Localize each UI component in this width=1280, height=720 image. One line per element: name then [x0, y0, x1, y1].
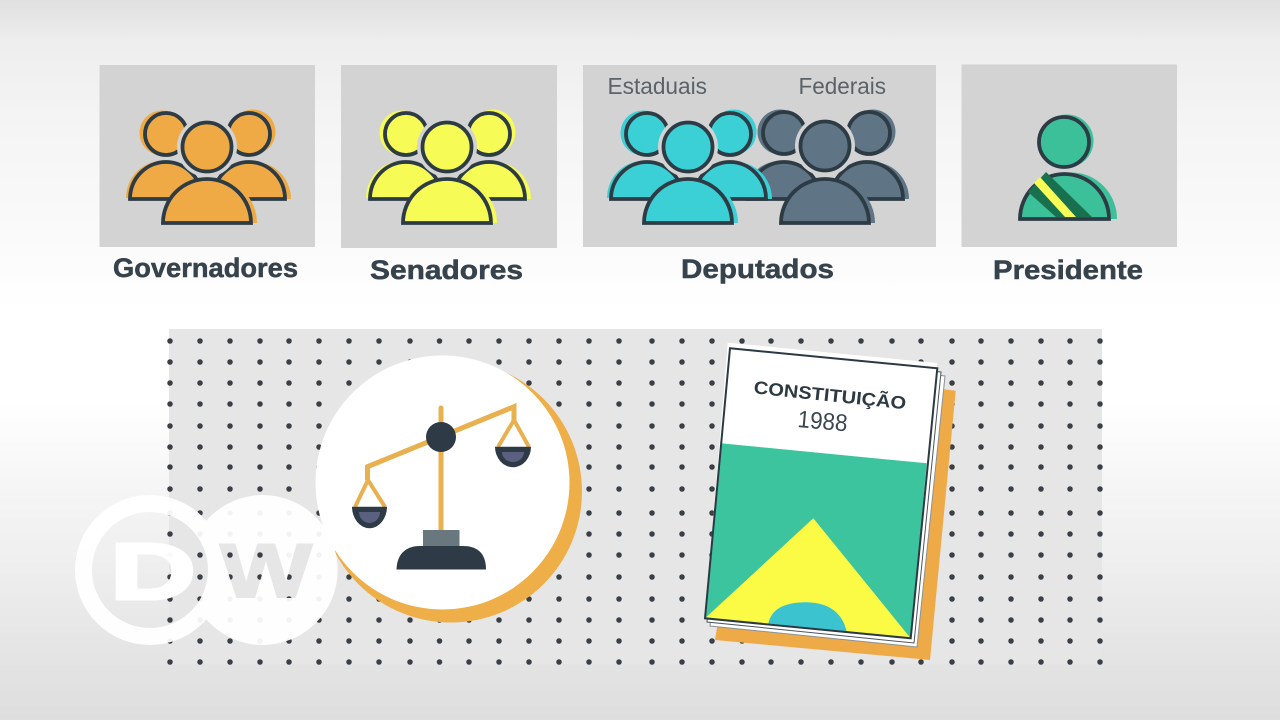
- icon: group of senators: [366, 110, 531, 223]
- panel: senadores: [341, 65, 557, 248]
- logo: DW: [75, 495, 338, 645]
- label: Governadores: Governadores: [113, 253, 298, 283]
- icon: president with sash: [1020, 114, 1117, 219]
- label: Presidente: Presidente: [993, 255, 1143, 285]
- icon: group of governors: [126, 110, 291, 223]
- panel: dotted background: [169, 329, 1102, 664]
- book year: 1988: [796, 406, 849, 437]
- label: Deputados: Deputados: [681, 254, 834, 284]
- label: Senadores: Senadores: [370, 255, 523, 285]
- panel: governadores: [100, 65, 315, 247]
- icon: scales of justice: [316, 356, 582, 622]
- book title: CONSTITUIÇÃO: [753, 376, 907, 413]
- label: Federais: Federais: [798, 73, 886, 99]
- panel: presidente: [962, 64, 1177, 247]
- icon: federal deputies: [744, 110, 909, 223]
- label: Estaduais: Estaduais: [608, 73, 707, 99]
- icon: constitution book: [705, 343, 956, 660]
- logo: DW: D: [110, 527, 196, 616]
- icon: state deputies: [607, 110, 772, 223]
- panel: deputados: [583, 65, 936, 247]
